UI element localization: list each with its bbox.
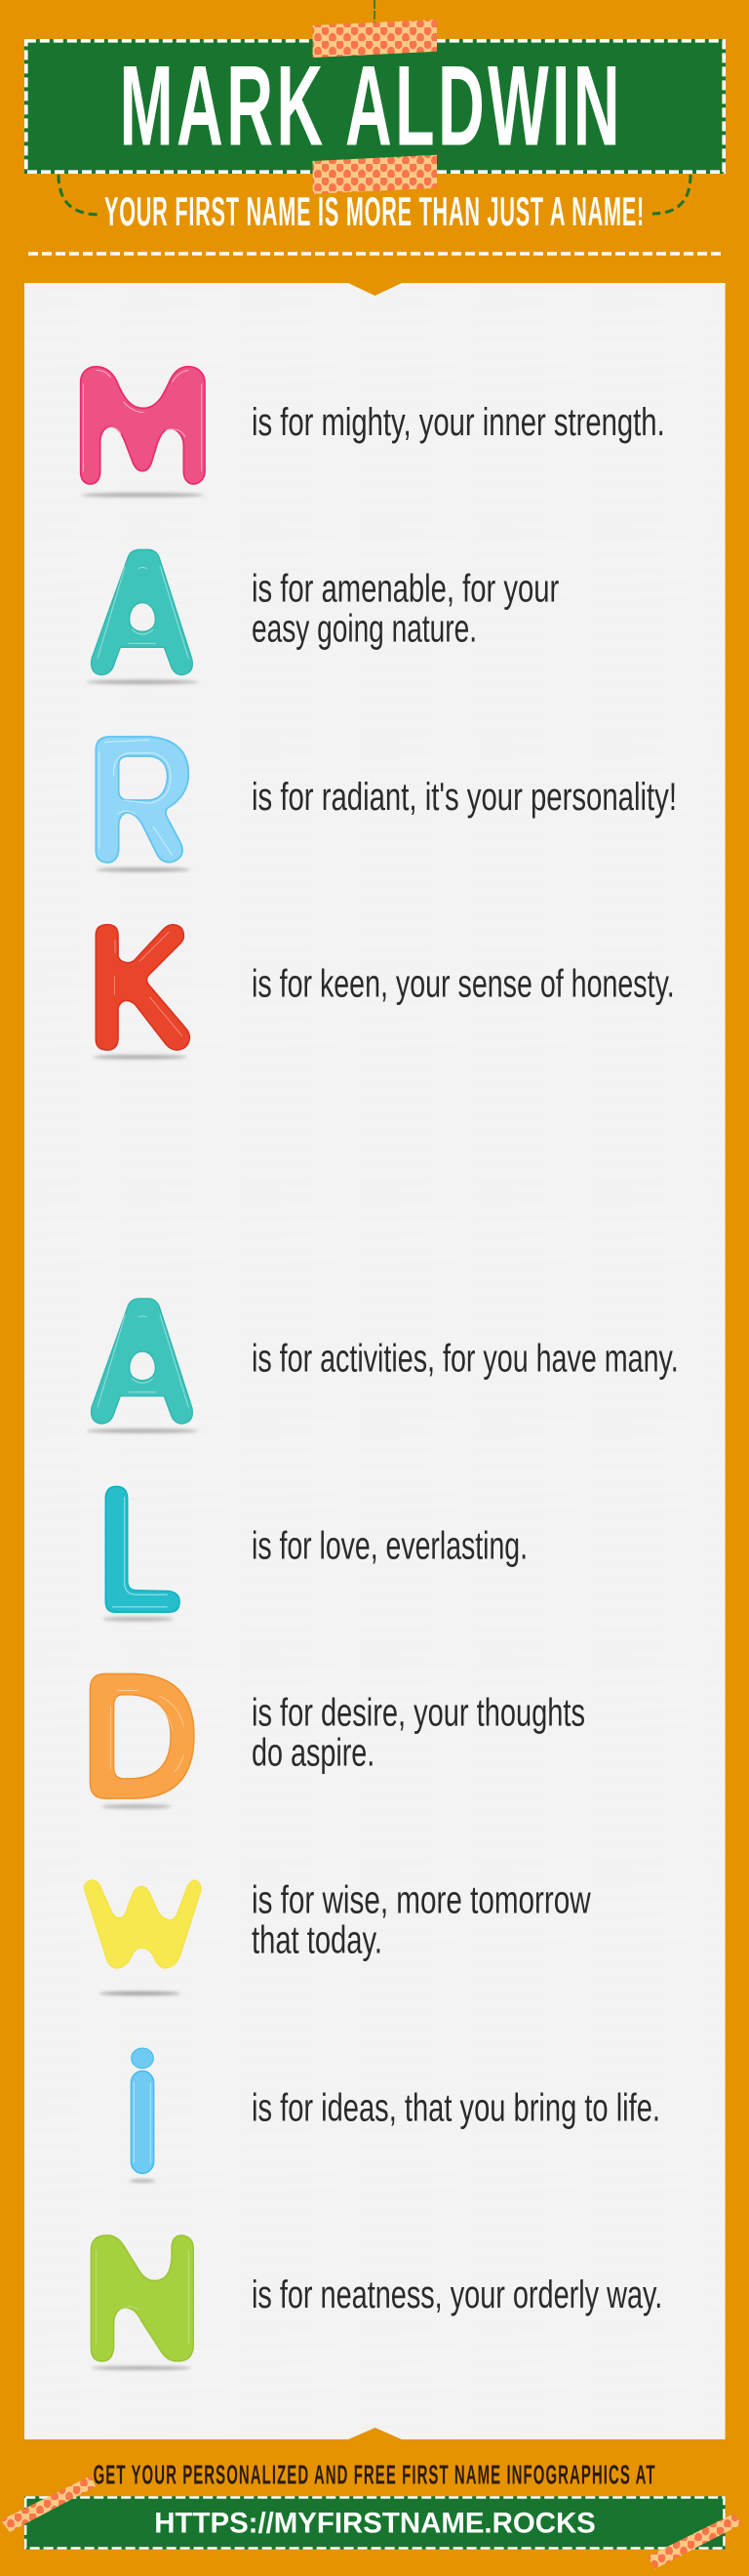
icon: letter i [130, 2048, 155, 2183]
icon: letter M [81, 367, 205, 498]
footer url: HTTPS://MYFIRSTNAME.ROCKS [154, 2507, 596, 2539]
row: N [91, 2235, 662, 2370]
text: W: is for wise, more tomorrow [252, 1879, 591, 1922]
footer [1, 2460, 742, 2569]
icon: letter N [91, 2235, 193, 2370]
title banner [24, 39, 726, 174]
row: A [87, 549, 559, 684]
icon: letter A second [87, 1299, 198, 1433]
text: A [252, 568, 559, 651]
left dashed connector [59, 175, 100, 215]
footer banner [24, 2496, 726, 2550]
header [24, 0, 726, 254]
icon: letter R [96, 737, 190, 872]
right footer tape [648, 2514, 742, 2569]
right dashed connector [652, 175, 690, 214]
text: A: easy going nature. [252, 608, 477, 651]
text: D [252, 1692, 585, 1774]
bottom tape [313, 155, 437, 194]
icon: letter K [93, 925, 189, 1060]
row: L [102, 1487, 528, 1621]
main panel [24, 283, 726, 2439]
banner dashed border [26, 41, 724, 172]
dashed separator [28, 252, 721, 256]
icon: letter W [84, 1880, 201, 1995]
text: A: is for amenable, for your [252, 568, 559, 611]
icon: letter A [87, 549, 198, 684]
row: W [84, 1879, 591, 1995]
row: K [93, 925, 675, 1060]
row: i [130, 2048, 660, 2183]
row: R [96, 737, 677, 872]
row: A second [87, 1299, 679, 1433]
left footer tape [1, 2475, 96, 2532]
icon: letter D [90, 1673, 194, 1809]
text: D: do aspire. [252, 1731, 374, 1774]
text: W: that today. [252, 1919, 382, 1962]
text: W [252, 1879, 591, 1962]
footer dashed border [25, 2498, 724, 2549]
row: M [81, 367, 665, 498]
text: D: is for desire, your thoughts [252, 1692, 585, 1735]
top tape [313, 20, 437, 58]
text: L: is for love, everlasting. [252, 1524, 528, 1567]
hanging string [374, 0, 375, 23]
row: D [90, 1673, 585, 1809]
icon: letter L [102, 1487, 179, 1621]
